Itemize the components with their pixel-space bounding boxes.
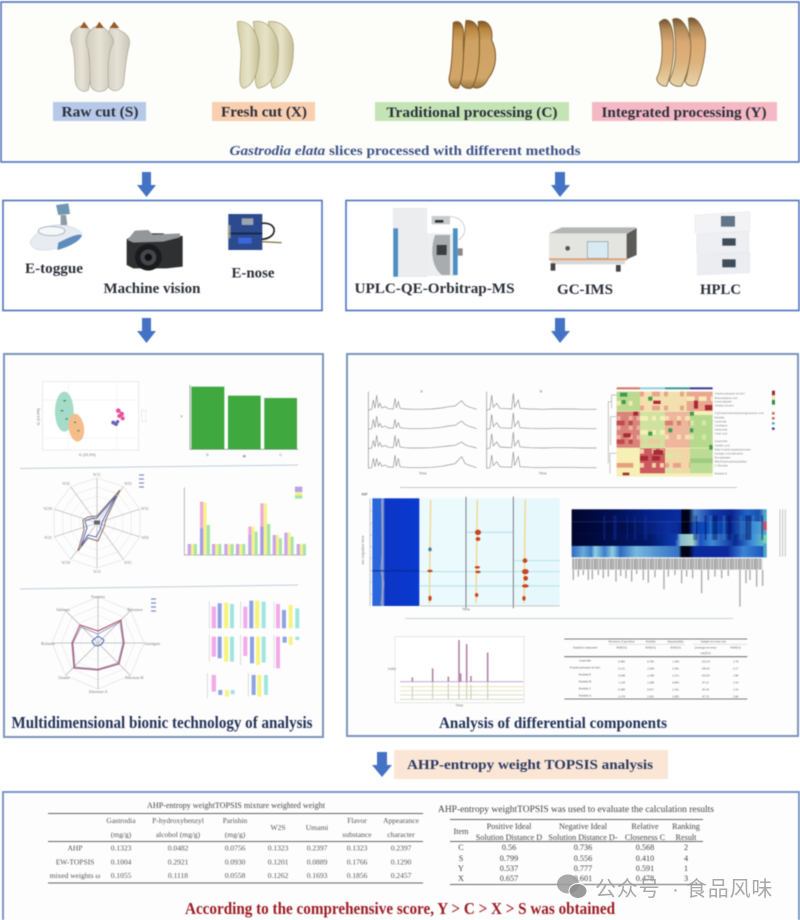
table: calculation results: AHP-entropy weightTOPSIS was used to evaluate the calculation results xyxy=(438,805,714,815)
chart: HPLC chromatogram xyxy=(388,637,524,708)
heading: bionic analysis: Multidimensional bionic technology of analysis xyxy=(12,713,313,732)
icon: electronic nose xyxy=(227,214,282,250)
table: method validation xyxy=(564,639,747,699)
panel: differential components analysis xyxy=(347,354,798,736)
table: method validation: Parishin A xyxy=(579,693,592,697)
table: calculation results: 0.799 xyxy=(500,854,518,863)
chart: metabolite heatmap: 4-hydroxybenzyl alcohol xyxy=(715,392,745,396)
table: mixture weighted weight: 0.2397 xyxy=(307,844,328,852)
table: mixture weighted weight: 0.0482 xyxy=(168,844,189,852)
table: mixture weighted weight: W2S xyxy=(270,823,286,832)
panel: multidimensional bionic analysis xyxy=(4,354,323,737)
chart: metabolite heatmap: Guanosine xyxy=(715,439,728,443)
table: method validation: 0.785 xyxy=(647,659,654,663)
table: mixture weighted weight: AHP xyxy=(67,844,83,852)
table: mixture weighted weight: alcohol (mg/g) xyxy=(156,830,201,839)
label: raw cut: Raw cut (S) xyxy=(62,104,139,120)
table: calculation results: 0.56 xyxy=(502,843,516,852)
table: mixture weighted weight: 0.1766 xyxy=(347,858,368,866)
image: fresh cut slices xyxy=(237,21,293,88)
label: AHP-entropy weight TOPSIS analysis: AHP-entropy weight TOPSIS analysis xyxy=(407,758,654,773)
icon: camera xyxy=(127,230,183,271)
chart: chromatograms: B xyxy=(540,390,543,394)
table: calculation results: 0.568 xyxy=(636,843,654,852)
table: calculation results xyxy=(438,805,714,884)
chart: green bars: S xyxy=(206,453,209,457)
chart: chromatograms: Time xyxy=(539,472,547,476)
chart: metabolite heatmap: Pyroglutamic xyxy=(715,456,731,460)
table: method validation: P-hydroxybenzyl alcohol xyxy=(570,666,600,670)
chart: metabolite heatmap: Citric acid xyxy=(715,432,728,436)
table: calculation results: S xyxy=(459,854,464,863)
table: calculation results: Solution Distance D- xyxy=(548,833,618,842)
table: mixture weighted weight: Flavor xyxy=(347,816,367,825)
table: calculation results: Result xyxy=(676,833,697,842)
table: mixture weighted weight: 0.2397 xyxy=(391,844,412,852)
table: mixture weighted weight: Appearance xyxy=(383,816,420,825)
table: calculation results: 2 xyxy=(684,843,688,852)
table: mixture weighted weight: 0.1323 xyxy=(111,844,132,852)
chart: radar PEN3: W2S xyxy=(44,536,52,540)
table: calculation results: 4 xyxy=(684,854,688,863)
table: calculation results: Negative Ideal xyxy=(559,822,608,831)
arrow: to analytical instruments xyxy=(551,172,570,197)
chart: taste radar: Astringent xyxy=(144,642,161,646)
chart: metabolite heatmap: Gastrodigenin xyxy=(715,400,732,404)
table: method validation: 2.261 xyxy=(647,694,654,698)
table: method validation: Parishin B xyxy=(579,679,591,683)
table: mixture weighted weight: (mg/g) xyxy=(111,830,132,839)
table: method validation: 100.45 xyxy=(702,667,710,671)
chart: metabolite heatmap: Parishin xyxy=(715,415,725,419)
table: method validation: 97.21 xyxy=(702,680,709,684)
chart: metabolite heatmap xyxy=(608,387,775,477)
chart: taste radar: Sourness xyxy=(91,595,105,599)
chart: taste radar: Aftertaste-B xyxy=(125,676,144,680)
table: calculation results: Closeness C xyxy=(625,833,666,842)
table: calculation results: Item xyxy=(453,827,469,836)
table: mixture weighted weight: 0.1693 xyxy=(307,871,328,880)
table: calculation results: 0.410 xyxy=(636,854,654,863)
chart: metabolite heatmap: Vanillic acid xyxy=(715,443,730,447)
chart: radar PEN3: W1W xyxy=(61,561,71,565)
table: method validation: 102.03 xyxy=(702,673,710,677)
chart: radar PEN3: W5S xyxy=(124,482,132,486)
label: raw cut xyxy=(53,102,146,121)
chart: taste radar: Aftertaste-A xyxy=(89,690,108,694)
icon: UPLC-QE-Orbitrap-MS xyxy=(393,208,465,277)
table: mixture weighted weight: 0.0756 xyxy=(225,844,246,852)
panel: bionic instruments xyxy=(3,200,322,310)
conclusion: According to the comprehensive score, Y > C > X > S was obtained xyxy=(185,899,615,918)
chart: GC-IMS topography xyxy=(361,492,560,612)
chart: taste radar: Bitterness xyxy=(127,608,143,612)
label: UPLC-QE-Orbitrap-MS: UPLC-QE-Orbitrap-MS xyxy=(354,281,514,297)
table: method validation: 102.54 xyxy=(702,659,710,663)
chart: radar PEN3: W3C xyxy=(141,507,149,511)
table: method validation: Parishin E xyxy=(579,672,591,676)
image: traditional processing slices xyxy=(449,21,496,88)
arrow: to TOPSIS analysis xyxy=(372,752,392,777)
table: mixture weighted weight: Umami xyxy=(306,823,328,832)
table: method validation: Precision of precision xyxy=(609,640,635,644)
table: mixture weighted weight: 0.1201 xyxy=(268,858,289,866)
table: method validation: RSD(%) xyxy=(670,646,681,650)
chart: green bars: C xyxy=(279,453,282,457)
table: mixture weighted weight: 0.1004 xyxy=(111,858,132,866)
table: mixture weighted weight: 0.0889 xyxy=(307,858,328,866)
table: method validation: RSD(%) xyxy=(645,646,656,650)
chart: metabolite heatmap: Parishin E xyxy=(715,472,727,476)
panel: TOPSIS results xyxy=(3,792,799,920)
table: mixture weighted weight: EW-TOPSIS xyxy=(56,858,94,866)
watermark: WeChat account: 公众号 xyxy=(595,878,660,901)
table: calculation results: 0.657 xyxy=(500,874,518,883)
arrow: to bionic instruments xyxy=(137,172,156,197)
icon: electronic tongue xyxy=(30,203,82,250)
table: calculation results: Solution Distance D xyxy=(476,833,542,842)
chart: taste radar: Saltiness xyxy=(56,608,70,612)
table: calculation results: 0.537 xyxy=(500,864,518,873)
table: mixture weighted weight: 0.1118 xyxy=(168,871,188,880)
chart: taste radar: Umami xyxy=(58,676,70,680)
table: calculation results: 3 xyxy=(684,874,688,883)
chart: metabolite heatmap: Benzaldehyde acid xyxy=(715,396,738,400)
table: method validation: 0.486 xyxy=(618,687,626,691)
chart: radar PEN3: W1C xyxy=(93,473,101,477)
table: method validation: Standard compound xyxy=(573,646,597,650)
table: calculation results: 1 xyxy=(684,864,688,873)
table: mixture weighted weight: 0.0930 xyxy=(225,858,246,866)
table: method validation: 2.085 xyxy=(672,694,679,698)
table: mixture weighted weight: 0.1323 xyxy=(347,844,368,852)
chart: radar PEN3: W2W xyxy=(43,507,53,511)
chart: metabolite heatmap: L-Tyrosine xyxy=(715,464,729,468)
panel: analytical instruments xyxy=(346,200,799,310)
label: fresh cut xyxy=(212,102,315,121)
table: method validation: 2.34 xyxy=(733,680,739,684)
chart: HPLC chromatogram: mAU xyxy=(388,667,396,671)
chart: green bars xyxy=(181,385,298,458)
table: method validation: RSD(%) xyxy=(616,646,627,650)
chart: chromatograms: A xyxy=(420,390,423,394)
heading: differential components: Analysis of differential components xyxy=(439,715,667,732)
table: calculation results: 0.736 xyxy=(574,843,592,852)
panel: processing methods xyxy=(1,2,799,162)
table: method validation: Gastrodin xyxy=(579,659,591,663)
chart: green bars: b xyxy=(181,414,183,418)
chart: sensor bars xyxy=(184,487,306,555)
table: method validation: 95.34 xyxy=(702,687,709,691)
table: method validation: 1.289 xyxy=(647,680,654,684)
table: mixture weighted weight: 0.1856 xyxy=(347,871,368,880)
table: calculation results: 0.601 xyxy=(574,874,592,883)
table: method validation: 2.215 xyxy=(672,673,679,677)
table: method validation: 2.96 xyxy=(733,694,739,698)
label: machine vision: Machine vision xyxy=(104,281,200,297)
label: integrated processing: Integrated processing (Y) xyxy=(602,105,767,121)
label: e-tongue: E-toggue xyxy=(25,261,84,277)
chart: radar PEN3: W1S xyxy=(93,570,101,574)
table: method validation: RSD(%) xyxy=(730,646,741,650)
label: AHP-entropy weight TOPSIS analysis xyxy=(394,750,668,779)
image: integrated processing slices xyxy=(657,18,706,86)
chart: green bars: M xyxy=(243,454,246,458)
table: method validation: 1.86 xyxy=(733,673,739,677)
chart: metabolite heatmap: Cirsilineol xyxy=(715,424,727,428)
icon: GC-IMS xyxy=(549,227,637,272)
table: method validation: rate)(%) xyxy=(701,651,711,655)
label: traditional processing: Traditional processing (C) xyxy=(386,105,558,121)
chart: HPLC chromatogram: Time xyxy=(455,704,463,708)
table: method validation: 2.161 xyxy=(672,687,679,691)
chart: metabolite heatmap: Bis(4-hydroxybenzyl)ether xyxy=(715,460,747,464)
table: mixture weighted weight xyxy=(48,800,423,883)
label: e-nose: E-nose xyxy=(232,266,275,282)
table: method validation: Parishin C xyxy=(579,686,591,690)
table: calculation results: 0.478 xyxy=(636,874,654,883)
table: method validation: 0.299 xyxy=(618,673,626,677)
table: method validation: 2.364 xyxy=(647,667,654,671)
watermark: WeChat account: · xyxy=(672,878,680,901)
image: raw cut slices xyxy=(71,22,130,92)
chart: taste radar xyxy=(41,595,161,694)
table: method validation: 0.121 xyxy=(618,667,626,671)
table: mixture weighted weight: 0.0558 xyxy=(225,871,246,880)
arrow: to bionic analysis xyxy=(137,318,156,343)
chart: GC-IMS topography: RIP xyxy=(362,492,368,496)
chart: chromatograms: Time xyxy=(419,472,427,476)
table: mixture weighted weight: (mg/g) xyxy=(225,830,246,839)
table: calculation results: Ranking xyxy=(672,822,700,831)
table: method validation: Stability xyxy=(646,640,656,644)
table: calculation results: Relative xyxy=(631,822,659,831)
table: calculation results: 0.591 xyxy=(636,864,654,873)
table: mixture weighted weight: 0.1290 xyxy=(391,858,412,866)
chart: PCA scatter xyxy=(36,382,146,457)
icon: HPLC xyxy=(695,212,750,275)
chart: metabolite heatmap: Ethyl 4-hydroxyphenylacetate xyxy=(715,448,751,452)
caption: methods: Gastrodia elata slices processed with different methods xyxy=(230,144,581,159)
chart: metabolite heatmap: Adenosine xyxy=(715,428,728,432)
chart: PCA scatter: t1 (20.3%) xyxy=(79,453,96,457)
table: calculation results: Y xyxy=(458,864,464,873)
chart: taste small multiples xyxy=(207,601,299,698)
table: mixture weighted weight: 0.1323 xyxy=(268,844,289,852)
table: method validation: 0.917 xyxy=(647,687,654,691)
arrow: to differential analysis xyxy=(551,318,570,343)
table: method validation: Repeatability xyxy=(668,640,684,644)
table: method validation: 1.78 xyxy=(733,659,739,663)
table: mixture weighted weight: 0.1262 xyxy=(268,871,289,880)
table: calculation results: 0.777 xyxy=(574,864,592,873)
table: method validation: Sample recovery rate xyxy=(701,640,727,644)
table: mixture weighted weight: Parishin xyxy=(223,816,248,825)
table: mixture weighted weight: substance xyxy=(342,830,372,839)
label: GC-IMS: GC-IMS xyxy=(557,282,613,298)
chart: chromatograms xyxy=(368,390,597,476)
table: mixture weighted weight: mixed weights ω xyxy=(50,871,100,880)
chart: GC-IMS topography: Ion migration time xyxy=(361,535,365,565)
chart: PCA scatter: t2 (14.5%) xyxy=(36,408,40,425)
table: mixture weighted weight: 0.2457 xyxy=(391,871,412,880)
table: method validation: (average recovery xyxy=(695,646,717,650)
table: method validation: 2.178 xyxy=(618,694,626,698)
table: method validation: 2.186 xyxy=(647,673,654,677)
table: mixture weighted weight: character xyxy=(387,830,415,839)
table: method validation: 1.129 xyxy=(618,680,626,684)
chart: metabolite heatmap: Gastrodin xyxy=(715,420,727,424)
table: method validation: 97.72 xyxy=(702,694,709,698)
chart: GC-IMS topography: Time xyxy=(462,608,470,612)
table: method validation: 0.963 xyxy=(672,680,679,684)
table: method validation: 0.482 xyxy=(618,659,626,663)
label: fresh cut: Fresh cut (X) xyxy=(221,104,307,120)
chart: metabolite heatmap: Syringic acid derivative xyxy=(715,452,744,456)
table: mixture weighted weight: Gastrodia xyxy=(106,816,136,825)
table: method validation: 1.284 xyxy=(672,659,679,663)
chart: metabolite heatmap: 3-[(4-hydroxybenzyl)oxy]propanoic acid xyxy=(715,411,764,415)
table: calculation results: 0.556 xyxy=(574,854,592,863)
chart: radar PEN3: W6S xyxy=(141,536,149,540)
table: mixture weighted weight: P-hydroxybenzyl xyxy=(152,816,204,825)
table: mixture weighted weight: AHP-entropy weightTOPSIS mixture weighted weight xyxy=(147,800,326,810)
label: HPLC: HPLC xyxy=(700,282,741,298)
chart: metabolite heatmap: Vanillyl alcohol xyxy=(715,404,734,408)
table: mixture weighted weight: 0.1055 xyxy=(111,871,132,880)
table: calculation results: X xyxy=(458,874,464,883)
watermark: WeChat account: 食品风味 xyxy=(686,878,773,901)
table: method validation: 2.381 xyxy=(672,667,679,671)
table: calculation results: C xyxy=(458,843,464,852)
chart: radar PEN3: W3S xyxy=(62,482,70,486)
chart: taste radar: Richness xyxy=(41,642,55,646)
table: calculation results: Positive Ideal xyxy=(487,822,532,831)
table: method validation: 2.17 xyxy=(733,667,739,671)
chart: radar PEN3 xyxy=(43,473,149,574)
table: method validation: 1.54 xyxy=(733,687,739,691)
table: mixture weighted weight: 0.2921 xyxy=(168,858,189,866)
chart: radar PEN3: W5C xyxy=(124,561,132,565)
chart: GC-IMS fingerprint heatmap xyxy=(572,509,785,607)
